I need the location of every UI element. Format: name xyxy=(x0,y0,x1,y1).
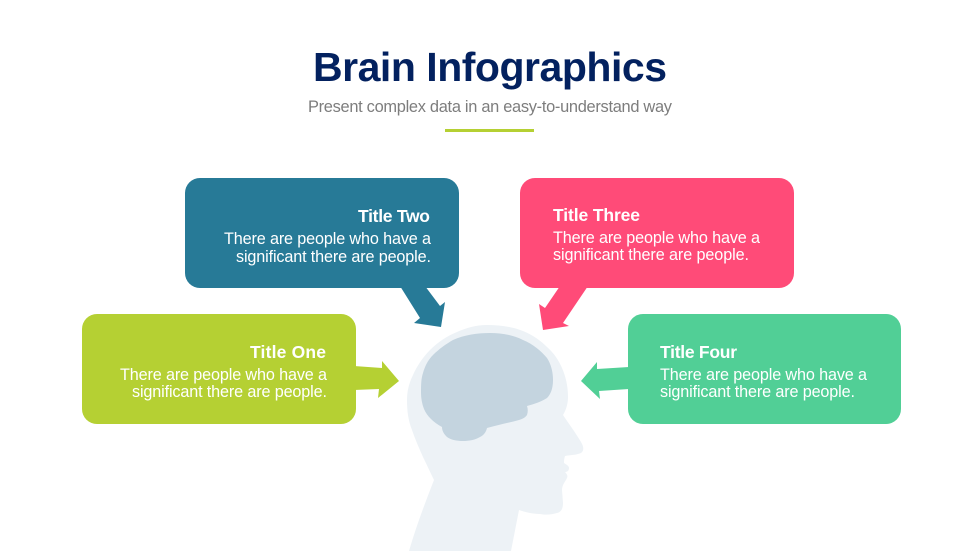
title: Brain Infographics xyxy=(313,44,667,90)
box: title one xyxy=(82,314,356,424)
box: title three xyxy=(520,178,794,288)
title underline accent xyxy=(445,129,534,132)
brain xyxy=(421,333,553,441)
arrow: title three to head xyxy=(539,286,588,330)
text: title two body: There are people who have a xyxy=(224,230,431,248)
panel: title one xyxy=(82,314,399,424)
text: title three body: There are people who have a xyxy=(553,229,760,247)
panel: title four xyxy=(581,314,901,424)
text: title two body: significant there are people. xyxy=(236,248,431,266)
head silhouette xyxy=(407,325,583,551)
heading: title two: Title Two xyxy=(358,206,430,226)
panel: title two xyxy=(185,178,459,327)
arrow: title one to head xyxy=(354,361,399,398)
heading: title four: Title Four xyxy=(660,342,737,362)
text: title three body xyxy=(553,229,760,264)
panel: title three xyxy=(520,178,794,330)
text: title one body xyxy=(120,366,327,401)
arrow: title four to head xyxy=(581,362,629,399)
subtitle: Present complex data in an easy-to-understand way xyxy=(308,98,673,116)
text: title three body: significant there are people. xyxy=(553,246,749,264)
heading: title one: Title One xyxy=(250,342,326,362)
text: title four body xyxy=(660,366,867,401)
box: title four xyxy=(628,314,901,424)
text: title four body: significant there are people. xyxy=(660,383,855,401)
text: title one body: significant there are people. xyxy=(132,383,327,401)
text: title four body: There are people who have a xyxy=(660,366,867,384)
text: title one body: There are people who have a xyxy=(120,366,327,384)
text: title two body xyxy=(224,230,431,266)
arrow: title two to head xyxy=(400,286,445,327)
heading: title three: Title Three xyxy=(553,205,640,225)
box: title two xyxy=(185,178,459,288)
